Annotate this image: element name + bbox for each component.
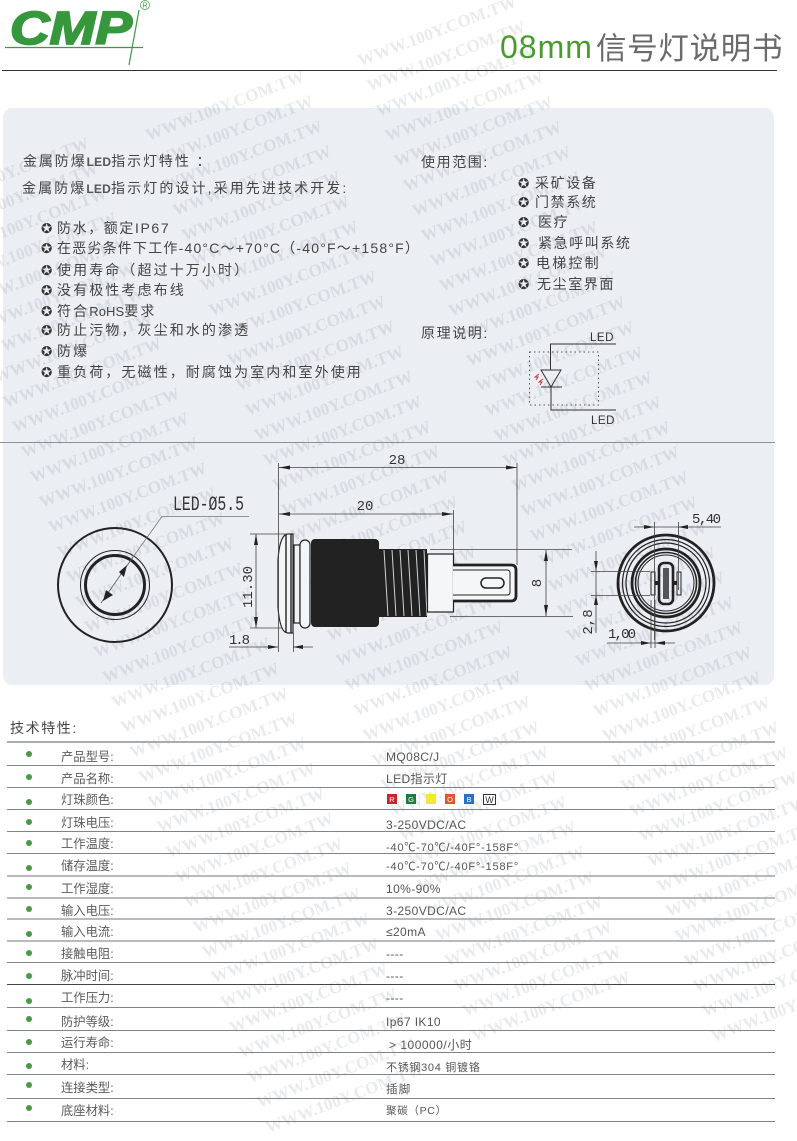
watermark pattern: WWW.100Y.COM.TW	[428, 192, 591, 270]
table labels: 工作压力:	[61, 991, 114, 1005]
drawing: front view: LED-Ø5.5	[173, 494, 244, 517]
table labels	[61, 750, 114, 1118]
dimensions: side view: 1.8	[229, 633, 250, 649]
table labels: 接触电阻:	[61, 946, 114, 961]
logo: CMP: CMP	[10, 2, 132, 54]
watermark pattern: WWW.100Y.COM.TW	[218, 934, 381, 1012]
watermark pattern: WWW.100Y.COM.TW	[627, 743, 791, 821]
watermark pattern: WWW.100Y.COM.TW	[518, 442, 682, 521]
watermark pattern: WWW.100Y.COM.TW	[225, 292, 388, 370]
table labels: 输入电压:	[61, 903, 114, 918]
feature list	[41, 220, 420, 381]
title: 08mm	[500, 29, 593, 65]
colour swatches	[387, 794, 496, 805]
dimensions: rear view: 5,40	[692, 512, 721, 528]
heading: technical specs: 技术特性:	[10, 720, 78, 736]
watermark pattern: WWW.100Y.COM.TW	[378, 717, 542, 795]
watermark pattern: WWW.100Y.COM.TW	[152, 92, 316, 170]
watermark pattern: WWW.100Y.COM.TW	[143, 67, 307, 145]
watermark pattern: WWW.100Y.COM.TW	[243, 342, 406, 420]
table values: 插脚	[386, 1082, 411, 1096]
feature list: ✪	[41, 241, 52, 257]
watermark pattern: WWW.100Y.COM.TW	[482, 342, 646, 421]
circuit diagram: LED: LED	[591, 415, 615, 427]
dimensions: side view: 20	[357, 499, 373, 515]
watermark pattern: WWW.100Y.COM.TW	[145, 734, 309, 812]
table values: ----	[386, 969, 404, 983]
colour swatches: R	[389, 795, 395, 804]
watermark pattern: WWW.100Y.COM.TW	[252, 367, 415, 445]
table values: > 100000/小时	[389, 1038, 472, 1052]
watermark pattern: WWW.100Y.COM.TW	[369, 692, 533, 770]
watermark pattern: WWW.100Y.COM.TW	[197, 217, 361, 295]
feature list: 防爆	[57, 343, 89, 359]
watermark pattern: WWW.100Y.COM.TW	[215, 267, 379, 345]
watermark pattern: WWW.100Y.COM.TW	[261, 392, 424, 470]
table values: MQ08C/J	[386, 750, 439, 764]
circuit diagram: LED	[530, 332, 616, 427]
watermark pattern: WWW.100Y.COM.TW	[127, 684, 291, 762]
watermark pattern: WWW.100Y.COM.TW	[9, 359, 173, 437]
watermark pattern: WWW.100Y.COM.TW	[382, 67, 546, 145]
table values: Ip67 IK10	[386, 1015, 441, 1029]
heading: usage scope: 使用范围:	[421, 154, 489, 170]
table labels: 材料:	[61, 1058, 89, 1072]
watermark pattern: WWW.100Y.COM.TW	[437, 217, 600, 295]
feature list: 符合RoHS要求	[57, 303, 156, 319]
watermark pattern: WWW.100Y.COM.TW	[410, 142, 573, 220]
watermark pattern: WWW.100Y.COM.TW	[473, 317, 637, 396]
feature list: ✪	[41, 323, 52, 339]
watermark pattern: WWW.100Y.COM.TW	[191, 859, 354, 937]
table labels: 灯珠电压:	[61, 816, 114, 830]
watermark pattern: WWW.100Y.COM.TW	[209, 909, 372, 987]
watermark pattern: WWW.100Y.COM.TW	[161, 117, 325, 195]
table labels: 运行寿命:	[61, 1035, 114, 1050]
watermark pattern: WWW.100Y.COM.TW	[288, 467, 451, 545]
usage list: 紧急呼叫系统	[538, 235, 632, 251]
watermark pattern: WWW.100Y.COM.TW	[500, 392, 664, 471]
watermark pattern: WWW.100Y.COM.TW	[351, 642, 515, 720]
watermark pattern: WWW.100Y.COM.TW	[179, 167, 343, 245]
feature list: ✪	[41, 365, 52, 381]
feature list: 防止污物，灰尘和水的渗透	[57, 322, 250, 338]
usage list: 采矿设备	[535, 175, 597, 191]
table values: 3-250VDC/AC	[386, 904, 466, 918]
table values: ----	[386, 991, 404, 1005]
watermark pattern: WWW.100Y.COM.TW	[163, 784, 327, 862]
watermark pattern: WWW.100Y.COM.TW	[55, 484, 218, 562]
watermark pattern: WWW.100Y.COM.TW	[136, 709, 300, 787]
watermark pattern: WWW.100Y.COM.TW	[315, 542, 479, 620]
colour swatches: O	[447, 795, 453, 804]
panel: background card	[3, 108, 774, 685]
watermark pattern: WWW.100Y.COM.TW	[170, 142, 334, 220]
dimensions: side view: 8	[530, 579, 546, 587]
colour swatches: G	[408, 795, 414, 804]
usage list: 医疗	[538, 214, 569, 230]
drawing: side view	[278, 534, 516, 633]
watermark pattern: WWW.100Y.COM.TW	[564, 568, 727, 646]
watermark pattern: WWW.100Y.COM.TW	[545, 517, 709, 596]
watermark pattern: WWW.100Y.COM.TW	[154, 759, 318, 837]
table values: LED指示灯	[386, 771, 448, 786]
watermark pattern: WWW.100Y.COM.TW	[182, 834, 345, 912]
watermark pattern: WWW.100Y.COM.TW	[373, 42, 537, 120]
watermark pattern: WWW.100Y.COM.TW	[91, 584, 255, 662]
feature list: ✪	[41, 344, 52, 360]
watermark pattern: WWW.100Y.COM.TW	[406, 792, 569, 870]
watermark pattern: WWW.100Y.COM.TW	[600, 668, 763, 746]
watermark pattern: WWW.100Y.COM.TW	[464, 292, 628, 371]
watermark pattern: WWW.100Y.COM.TW	[227, 959, 390, 1037]
table labels: 灯珠颜色:	[61, 792, 114, 807]
watermark pattern: WWW.100Y.COM.TW	[509, 417, 673, 496]
usage list	[518, 175, 632, 293]
watermark pattern: WWW.100Y.COM.TW	[19, 384, 182, 462]
watermark pattern: WWW.100Y.COM.TW	[591, 643, 754, 721]
watermark pattern: WWW.100Y.COM.TW	[364, 17, 528, 95]
watermark pattern: WWW.100Y.COM.TW	[536, 492, 700, 571]
colour swatches: B	[466, 795, 472, 804]
watermark pattern: WWW.100Y.COM.TW	[46, 459, 209, 537]
watermark pattern: WWW.100Y.COM.TW	[263, 1059, 427, 1137]
table values: -40℃-70℃/-40F°-158F°	[386, 842, 519, 854]
feature list: 防水，额定IP67	[57, 220, 170, 236]
table labels: 工作温度:	[61, 836, 114, 851]
watermark pattern: WWW.100Y.COM.TW	[324, 567, 488, 645]
usage list: ✪	[518, 195, 529, 211]
watermark pattern: WWW.100Y.COM.TW	[360, 667, 524, 745]
watermark pattern: WWW.100Y.COM.TW	[188, 192, 352, 270]
table labels: 底座材料:	[61, 1103, 114, 1118]
table rules	[7, 742, 775, 1122]
colour swatches: W	[485, 795, 494, 805]
text block: features heading: 金属防爆LED指示灯特性 ：	[23, 153, 212, 169]
logo: CMP: R	[142, 2, 148, 10]
watermark pattern: WWW.100Y.COM.TW	[206, 242, 370, 320]
watermark pattern: WWW.100Y.COM.TW	[636, 768, 797, 846]
colour swatches: Y	[428, 795, 434, 804]
title	[500, 29, 783, 66]
heading: principle: 原理说明:	[421, 325, 489, 341]
table labels: 脉冲时间:	[61, 968, 114, 983]
table labels: 输入电流:	[61, 924, 114, 939]
dimensions: rear view	[581, 512, 721, 648]
watermark pattern: WWW.100Y.COM.TW	[109, 634, 273, 712]
watermark pattern: WWW.100Y.COM.TW	[342, 617, 506, 695]
table values: 3-250VDC/AC	[386, 818, 466, 832]
watermark pattern: WWW.100Y.COM.TW	[118, 659, 282, 737]
table labels: 储存温度:	[61, 858, 114, 873]
usage list: ✪	[518, 215, 529, 231]
watermark pattern: WWW.100Y.COM.TW	[419, 167, 582, 245]
feature list: 没有极性考虑布线	[57, 282, 186, 298]
table labels: 连接类型:	[61, 1080, 114, 1095]
dimensions: side view: 11.30	[241, 566, 257, 608]
watermark pattern: WWW.100Y.COM.TW	[401, 117, 564, 195]
watermark pattern: WWW.100Y.COM.TW	[306, 517, 470, 595]
table values: 聚碳（PC）	[386, 1104, 447, 1117]
watermark pattern: WWW.100Y.COM.TW	[397, 767, 560, 845]
watermark pattern: WWW.100Y.COM.TW	[254, 1034, 418, 1112]
usage list: 电梯控制	[536, 255, 601, 271]
watermark pattern: WWW.100Y.COM.TW	[64, 509, 227, 587]
watermark pattern: WWW.100Y.COM.TW	[234, 317, 397, 395]
table values: ----	[386, 947, 404, 961]
watermark pattern: WWW.100Y.COM.TW	[433, 867, 596, 945]
usage list: ✪	[518, 176, 529, 192]
watermark pattern: WWW.100Y.COM.TW	[491, 367, 655, 446]
title: 信号灯说明书	[596, 32, 783, 66]
watermark pattern: WWW.100Y.COM.TW	[415, 817, 578, 895]
watermark pattern: WWW.100Y.COM.TW	[446, 242, 609, 320]
watermark pattern: WWW.100Y.COM.TW	[555, 543, 718, 621]
table labels: 防护等级:	[61, 1014, 114, 1029]
usage list: ✪	[518, 277, 529, 293]
usage list: ✪	[518, 256, 529, 272]
watermark pattern: WWW.100Y.COM.TW	[279, 442, 442, 520]
watermark pattern: WWW.100Y.COM.TW	[388, 742, 551, 820]
table labels: 产品型号:	[61, 750, 114, 764]
feature list: ✪	[41, 221, 52, 237]
watermark pattern: WWW.100Y.COM.TW	[469, 967, 633, 1045]
text block: features heading	[22, 153, 348, 196]
watermark pattern: WWW.100Y.COM.TW	[100, 609, 264, 687]
table values	[386, 750, 519, 1117]
table labels: 产品名称:	[61, 771, 114, 786]
watermark pattern: WWW.100Y.COM.TW	[582, 618, 745, 696]
watermark pattern: WWW.100Y.COM.TW	[297, 492, 461, 570]
watermark pattern: WWW.100Y.COM.TW	[609, 693, 772, 771]
dimensions: side view: 28	[389, 453, 405, 469]
watermark pattern: WWW.100Y.COM.TW	[200, 884, 363, 962]
watermark pattern: WWW.100Y.COM.TW	[424, 842, 587, 920]
table values: ≤20mA	[386, 925, 426, 939]
feature list: 在恶劣条件下工作-40°C～+70°C（-40°F～+158°F）	[57, 240, 420, 256]
watermark pattern: WWW.100Y.COM.TW	[392, 92, 555, 170]
watermark pattern: WWW.100Y.COM.TW	[618, 718, 782, 796]
feature list: 使用寿命（超过十万小时）	[57, 262, 250, 278]
circuit diagram: LED: LED	[590, 332, 614, 344]
watermark pattern: WWW.100Y.COM.TW	[451, 917, 614, 995]
panel divider	[0, 442, 775, 444]
feature list: ✪	[41, 263, 52, 279]
usage list: 无尘室界面	[537, 276, 615, 292]
watermark pattern: WWW.100Y.COM.TW	[82, 559, 245, 637]
dimensions: rear view: 2,8	[581, 609, 597, 635]
watermark pattern: WWW.100Y.COM.TW	[0, 334, 164, 412]
table bullets	[26, 751, 32, 1111]
drawing: front view	[58, 494, 249, 642]
watermark pattern: WWW.100Y.COM.TW	[573, 593, 736, 671]
usage list: ✪	[518, 236, 529, 252]
watermark pattern: WWW.100Y.COM.TW	[455, 267, 618, 345]
watermark pattern: WWW.100Y.COM.TW	[28, 409, 191, 487]
feature list: ✪	[41, 304, 52, 320]
text block: features heading: 金属防爆LED指示灯的设计,采用先进技术开发:	[22, 180, 348, 196]
feature list: ✪	[41, 283, 52, 299]
watermark pattern: WWW.100Y.COM.TW	[172, 809, 336, 887]
usage list: 门禁系统	[535, 194, 597, 210]
table values: 不锈钢304 铜镀铬	[386, 1060, 480, 1074]
watermark pattern: WWW.100Y.COM.TW	[270, 417, 433, 495]
watermark pattern: WWW.100Y.COM.TW	[236, 984, 399, 1062]
table labels: 工作湿度:	[61, 881, 114, 896]
dimensions: side view	[229, 453, 573, 652]
watermark pattern: WWW.100Y.COM.TW	[333, 592, 497, 670]
watermark pattern: WWW.100Y.COM.TW	[460, 942, 624, 1020]
feature list: 重负荷，无磁性，耐腐蚀为室内和室外使用	[57, 364, 363, 380]
header rule	[2, 70, 777, 72]
watermark pattern: WWW.100Y.COM.TW	[442, 892, 605, 970]
drawing: rear view	[618, 535, 714, 631]
table values: 10%-90%	[386, 882, 441, 896]
watermark pattern: WWW.100Y.COM.TW	[245, 1009, 408, 1087]
logo: CMP	[5, 0, 150, 65]
table values: -40℃-70℃/-40F°-158F°	[386, 861, 519, 873]
watermark pattern: WWW.100Y.COM.TW	[37, 434, 200, 512]
watermark pattern: WWW.100Y.COM.TW	[73, 534, 236, 612]
watermark pattern: WWW.100Y.COM.TW	[527, 467, 691, 546]
dimensions: rear view: 1,00	[608, 627, 636, 643]
